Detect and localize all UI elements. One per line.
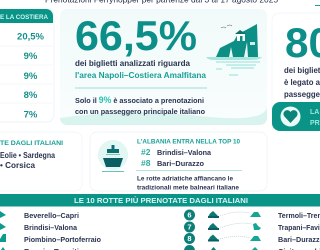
- table values: 9%: [24, 71, 38, 82]
- ship icons: [208, 211, 261, 250]
- route names: [278, 211, 320, 250]
- text: share: è legato a: [284, 78, 320, 87]
- text: description: tradizionali mete balneari italiane: [137, 184, 239, 192]
- table values: 7%: [24, 110, 38, 120]
- text: islands: [0, 151, 56, 170]
- rank badges: 8: [187, 234, 192, 243]
- panel: routes 6-10: [184, 210, 320, 250]
- table header: [0, 9, 53, 23]
- route names: Piombino–Portoferraio: [24, 235, 102, 244]
- heading: TE DAGLI ITALIANI: [0, 140, 63, 147]
- panel: 80%: [272, 13, 320, 131]
- ranks: Brindisi–Valona: [157, 148, 212, 157]
- text: note: con un passeggero principale italiano: [75, 107, 205, 116]
- route names: [24, 211, 102, 250]
- text: note: [75, 95, 205, 116]
- route lines: [220, 212, 252, 239]
- ranks: [141, 147, 212, 168]
- text: share: dei biglietti analizzati riguarda: [75, 59, 191, 68]
- panel: other destinations: [0, 132, 82, 191]
- heading: L'ALBANIA ENTRA NELLA TOP 10: [137, 138, 240, 146]
- ranks: Bari–Durazzo: [157, 159, 204, 168]
- icon: ferry: [98, 140, 128, 172]
- text: share: [75, 59, 207, 80]
- panel: Albania: [90, 132, 267, 192]
- rank badges: [184, 210, 195, 250]
- route names: Beverello–Capri: [24, 211, 79, 220]
- table values: 9%: [24, 51, 38, 62]
- table values: [17, 32, 45, 120]
- header text: E LA COSTIERA: [0, 14, 49, 21]
- text: note: Solo il 9% è associato a prenotazioni: [75, 95, 204, 105]
- panel: 66,5%: [60, 9, 267, 125]
- route names: Brindisi–Valona: [24, 223, 78, 232]
- text: islands: Eolie • Sardegna: [0, 151, 56, 160]
- text: share: dei bigliet: [284, 66, 320, 75]
- panel: top destinations table: [0, 9, 54, 122]
- text: islands: • Corsica: [0, 161, 36, 170]
- big number: 66,5%: [75, 12, 197, 59]
- band heading: LE 10 ROTTE PIÙ PRENOTATE DAGLI ITALIANI: [74, 196, 248, 205]
- rank badges: 6: [187, 211, 192, 220]
- text: share: [284, 66, 320, 99]
- callout: [272, 102, 320, 131]
- band heading: [0, 194, 320, 206]
- panel: routes 1-5: [0, 211, 102, 250]
- text: share: l'area Napoli–Costiera Amalfitana: [75, 71, 207, 80]
- icon: heart: [280, 106, 300, 126]
- text: description: [137, 176, 239, 192]
- table values: 8%: [24, 90, 38, 101]
- callout text: PR: [310, 120, 320, 127]
- ranks: #8: [141, 158, 151, 168]
- rank badges: 7: [187, 223, 192, 232]
- callout text: [310, 109, 320, 127]
- icon: island illustration: [206, 24, 262, 75]
- text: description: Le rotte adriatiche affiancano le: [137, 176, 233, 182]
- ranks: #2: [141, 147, 151, 157]
- ship icons: [0, 211, 6, 250]
- table values: 20,5%: [17, 32, 45, 42]
- callout text: LA: [310, 109, 319, 116]
